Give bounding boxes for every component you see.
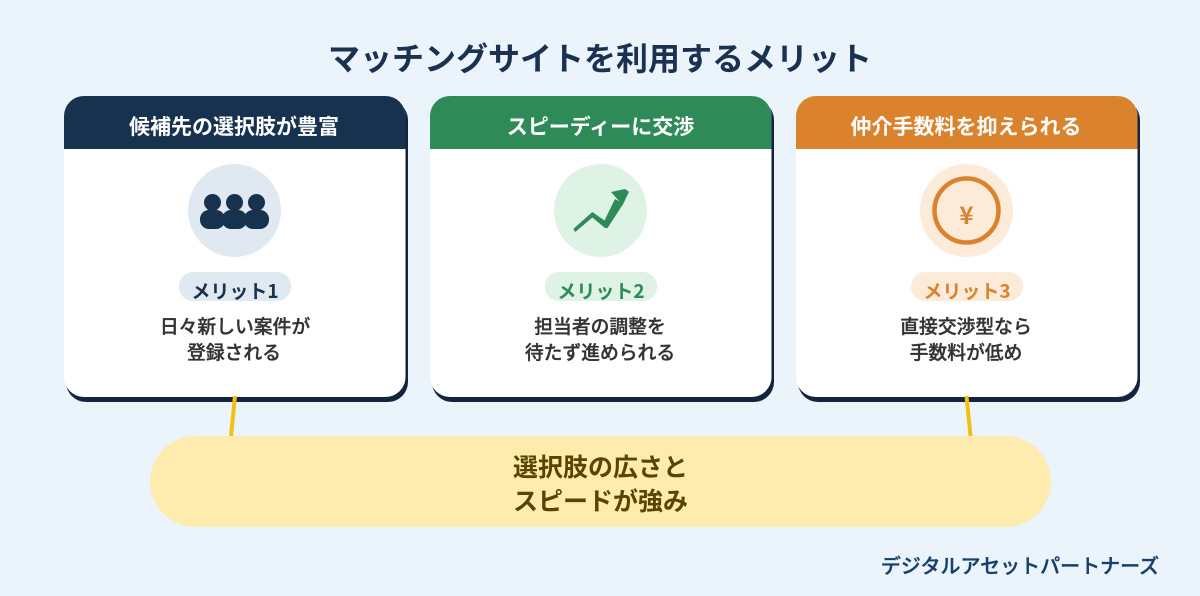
panel: merit 1: [64, 96, 408, 402]
text: merit 3 description: [900, 312, 1032, 365]
title: マッチングサイトを利用するメリット: [328, 34, 872, 80]
callout: 選択肢の広さと: [513, 448, 688, 484]
callout: スピードが強み: [513, 482, 688, 518]
icon: yen coin: ¥: [959, 196, 974, 231]
panel: merit 3: [796, 96, 1140, 402]
text: merit 1 description: 日々新しい案件が: [160, 312, 310, 339]
icon: rising arrow: [554, 164, 647, 257]
badge: merit 3: [911, 272, 1023, 304]
text: merit 2 description: 待たず進められる: [525, 338, 675, 365]
callout: [150, 436, 1051, 527]
icon: yen coin: [920, 164, 1013, 257]
badge: merit 2: メリット2: [557, 277, 645, 304]
connector: right: [966, 396, 970, 436]
badge: merit 3: メリット3: [923, 277, 1011, 304]
panel: merit 2: [430, 96, 774, 402]
header: merit 3: [796, 96, 1138, 149]
text: merit 2 description: 担当者の調整を: [534, 312, 666, 339]
text: merit 2 description: [525, 312, 675, 365]
icon: people: [188, 164, 281, 257]
header: merit 1: 候補先の選択肢が豊富: [129, 111, 339, 141]
text: merit 3 description: 直接交渉型なら: [900, 312, 1032, 339]
badge: merit 1: メリット1: [191, 277, 279, 304]
connector: left: [231, 396, 235, 436]
header: merit 2: スピーディーに交渉: [507, 111, 694, 141]
badge: merit 2: [545, 272, 657, 304]
text: merit 1 description: 登録される: [187, 338, 281, 365]
header: merit 3: 仲介手数料を抑えられる: [850, 111, 1082, 141]
text: merit 3 description: 手数料が低め: [910, 338, 1022, 365]
header: merit 1: [64, 96, 406, 149]
text: merit 1 description: [160, 312, 310, 365]
badge: merit 1: [179, 272, 291, 304]
footer credit: デジタルアセットパートナーズ: [881, 550, 1159, 579]
header: merit 2: [430, 96, 772, 149]
